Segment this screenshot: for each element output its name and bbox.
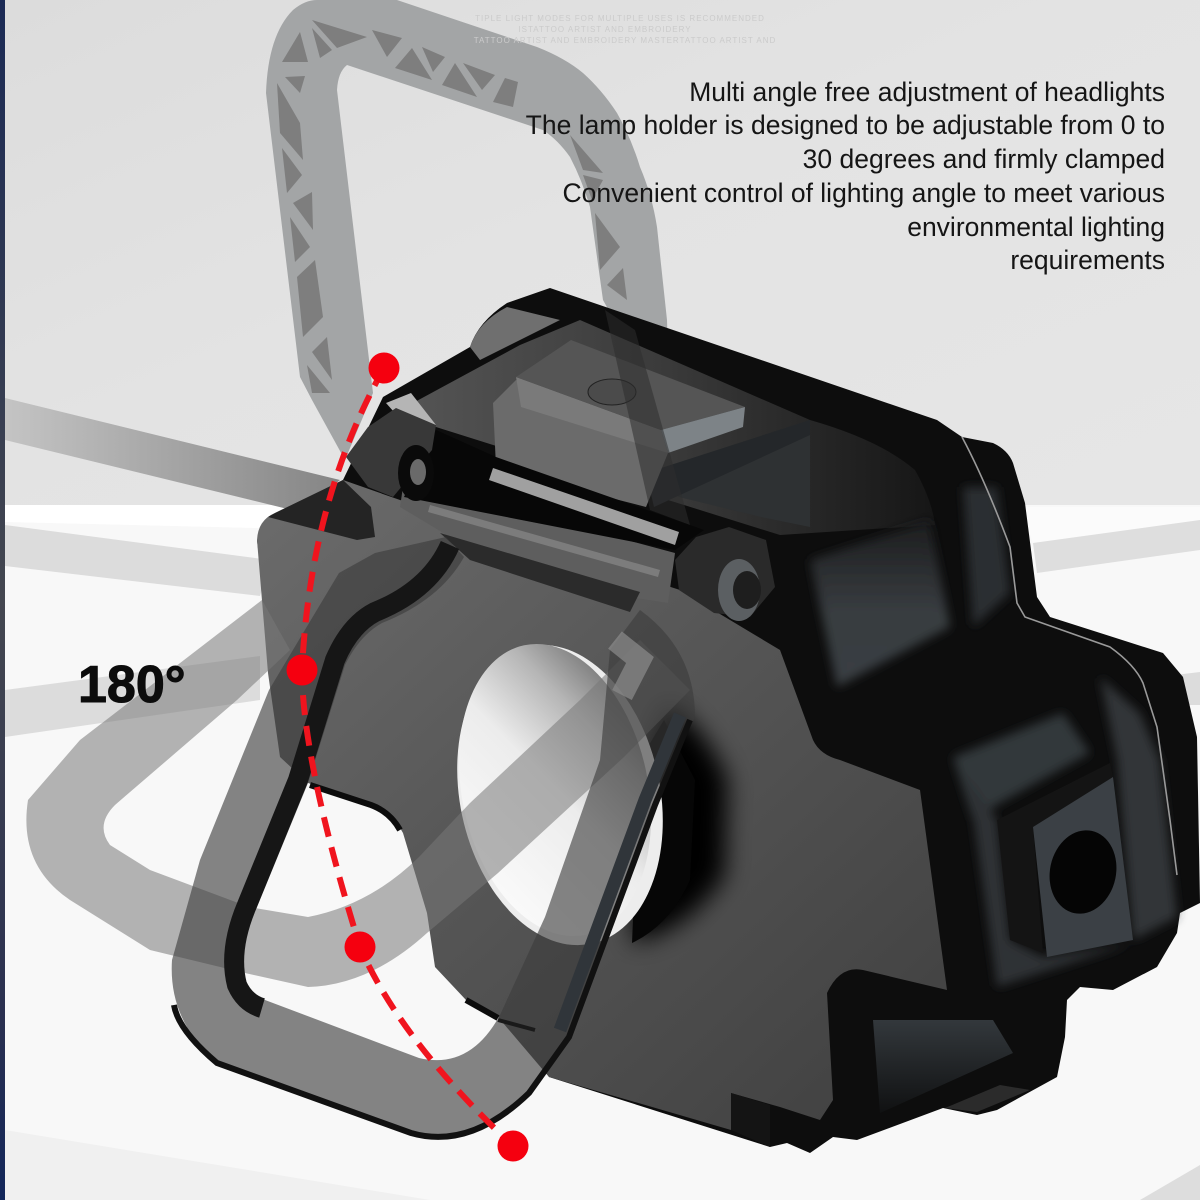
handle: front dark translucent loop [172,537,695,1137]
lamp body silhouette [257,288,1200,1153]
faint background caption: ISTATTOO ARTIST AND EMBROIDERY [518,25,692,34]
cut-out shadow [310,785,498,1018]
lamp back lobe [470,307,560,360]
handle outer rim [174,720,690,1137]
faint background caption: TIPLE LIGHT MODES FOR MULTIPLE USES IS RECOMMENDED [475,14,765,23]
faint background caption [474,14,776,45]
description text: 30 degrees and firmly clamped [803,144,1165,174]
description text: requirements [1010,245,1165,275]
handle: lower ghost loop [26,600,690,987]
description text [526,77,1165,275]
handle: horizontal ghost arm [5,398,340,512]
left image edge [0,0,5,1200]
hinge knuckle left [346,408,436,501]
lamp lens [431,626,728,964]
hinge knuckle right [675,527,775,621]
faint background caption: TATTOO ARTIST AND EMBROIDERY MASTERTATTOO ARTIST AND [474,36,776,45]
lamp socket with hole [997,763,1133,957]
lamp lower block [873,1020,1030,1113]
lamp front face [257,480,947,1130]
description text: The lamp holder is designed to be adjustable from 0 to [526,110,1165,140]
rim highlight [386,393,436,430]
red rotation arc [286,352,528,1162]
hinge bar [400,430,704,612]
description text: Convenient control of lighting angle to meet various [562,178,1165,208]
description text: environmental lighting [907,212,1165,242]
description text: Multi angle free adjustment of headlights [689,77,1165,107]
handle: upright ghost with lattice [266,0,670,460]
lattice triangles [277,20,627,393]
lamp top button [493,310,810,527]
handle inner dark rim [234,545,450,1008]
lamp side lit faces [810,437,1177,987]
lamp top plate [400,320,935,535]
angle label: 180° [78,656,186,714]
